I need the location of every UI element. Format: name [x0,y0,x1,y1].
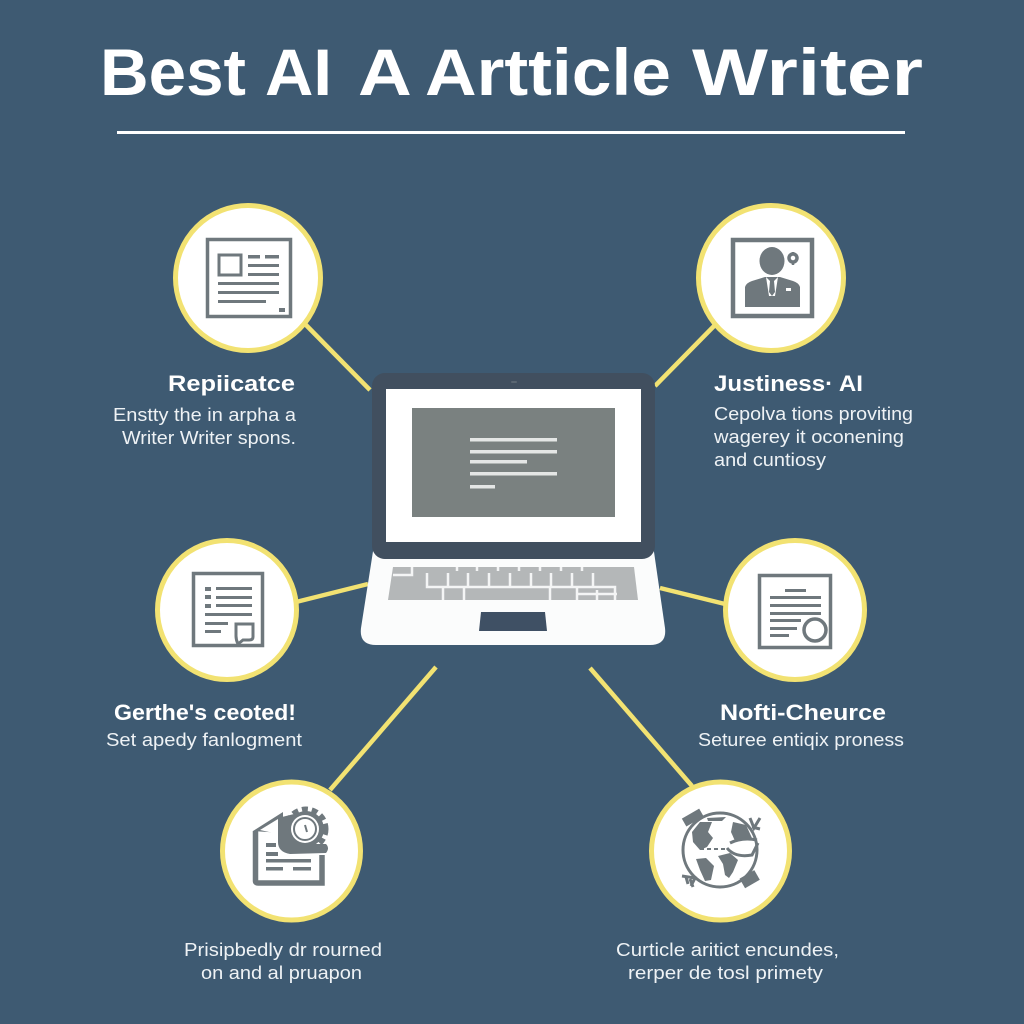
panel: bottom left [184,782,382,983]
icon circle [222,782,360,920]
panel: top right [698,206,913,470]
icon: certificate document [760,576,830,648]
webcam [511,381,517,383]
icon circle [652,782,790,920]
touchpad [479,612,547,631]
heading: Nofti-Cheurce [720,700,886,725]
icon: article layout [208,240,290,316]
icon circle [158,540,296,680]
icon circle [176,206,320,350]
panel: top left [113,206,320,448]
heading: Repiicatce [168,371,295,396]
title: Best [100,35,246,109]
icon: globe [682,809,760,888]
description: Set apedy fanlogment [106,730,302,750]
screen [386,389,641,542]
laptop base [361,545,665,645]
panel: middle right [698,540,904,750]
icon circle [726,540,864,680]
laptop [361,373,665,645]
icon: business person [733,240,812,316]
title: Writer [692,35,923,109]
description: Prisipbedly dr rourned [184,940,382,960]
description: rerper de tosl primety [628,963,823,983]
title: A [358,35,410,109]
keyboard [388,567,638,600]
description: Enstty the in arpha a [113,405,297,425]
panel: bottom right [616,782,839,983]
icon circle [698,206,844,350]
heading: Justiness· AI [714,371,863,396]
document window [412,408,615,517]
heading: Gerthe's ceoted! [114,700,296,725]
icon: document with note [194,574,262,646]
description: Cepolva tions proviting [714,404,913,424]
icon: document with gear and hand [253,809,328,883]
screen bezel [372,373,655,559]
description: on and al pruapon [201,963,362,983]
panel: middle left [106,540,302,750]
title: Artticle [425,35,671,109]
connector lines [296,324,725,790]
description: wagerey it oconening [713,427,904,447]
title: AI [265,35,332,109]
description: Writer Writer spons. [122,428,296,448]
description: and cuntiosy [714,450,826,470]
description: Seturee entiqix proness [698,730,904,750]
description: Curticle aritict encundes, [616,940,839,960]
